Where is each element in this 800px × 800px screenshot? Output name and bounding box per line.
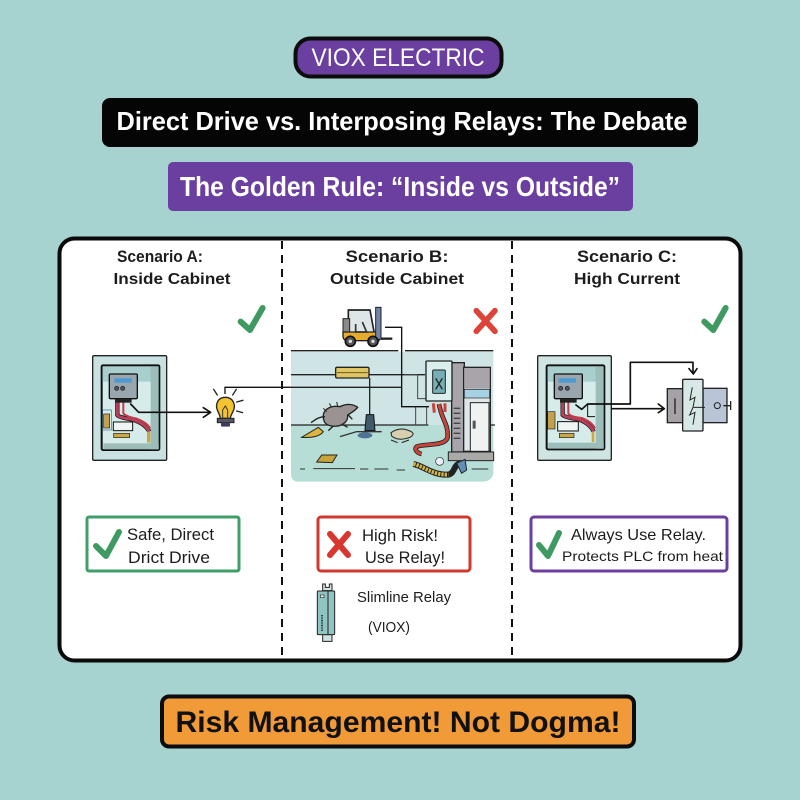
damaged cables (413, 403, 467, 475)
arrow: cabinet A to bulb (131, 404, 211, 417)
heading: scenario C: Scenario C: (577, 247, 677, 266)
title (102, 98, 698, 147)
banner: risk management (162, 696, 634, 746)
title: Direct Drive vs. Interposing Relays: The Debate (116, 106, 688, 136)
conduit box (336, 367, 369, 378)
callout: scenario B (318, 517, 470, 571)
label: slimline relay (357, 589, 451, 636)
callout: scenario A: Safe, Direct (127, 525, 214, 544)
badge: VIOX Electric (296, 38, 502, 76)
heading: scenario B: Scenario B: (346, 247, 448, 266)
heading: scenario A: Scenario A: (117, 247, 203, 266)
illustration: cabinet C (538, 356, 611, 460)
wire: bulb to field device (225, 387, 403, 394)
icon: green check C (704, 308, 726, 330)
callout: scenario A (87, 517, 239, 571)
arrows: cabinet C to relay (576, 362, 697, 417)
panel: scenarios (60, 238, 740, 660)
icon: red X (476, 311, 495, 331)
callout: scenario B: Use Relay! (365, 548, 445, 567)
callout: scenario C (531, 517, 727, 571)
icon: interposing relay (667, 379, 731, 431)
callout: scenario C: Protects PLC from heat (562, 548, 723, 564)
banner: risk management: Risk Management! Not Dogma! (176, 706, 620, 739)
callout: scenario A: Drict Drive (128, 548, 210, 567)
label: slimline relay: Slimline Relay (357, 589, 451, 606)
illustration: factory floor scene (285, 327, 495, 482)
callout: scenario C: Always Use Relay. (571, 527, 706, 544)
illustration: cabinet A (93, 356, 167, 460)
badge: VIOX Electric: VIOX ELECTRIC (312, 44, 484, 72)
label: slimline relay: (VIOX) (368, 619, 410, 636)
heading: scenario C (574, 247, 681, 288)
heading: scenario B (330, 247, 465, 288)
icon: light bulb (214, 389, 243, 427)
icon: forklift (343, 307, 392, 346)
field controller (426, 361, 452, 401)
heading: scenario A (114, 247, 231, 288)
rat (311, 402, 358, 431)
heading: scenario B: Outside Cabinet (330, 271, 465, 288)
heading: scenario A: Inside Cabinet (114, 271, 231, 288)
subtitle: golden rule (168, 162, 633, 211)
heading: scenario C: High Current (574, 271, 681, 288)
subtitle: golden rule: The Golden Rule: “Inside vs Outside” (180, 171, 620, 202)
wire to controller (385, 327, 429, 407)
machine (448, 363, 494, 461)
icon: green check A (241, 308, 263, 330)
callout: scenario B: High Risk! (362, 526, 438, 545)
icon: slimline relay (317, 584, 335, 641)
